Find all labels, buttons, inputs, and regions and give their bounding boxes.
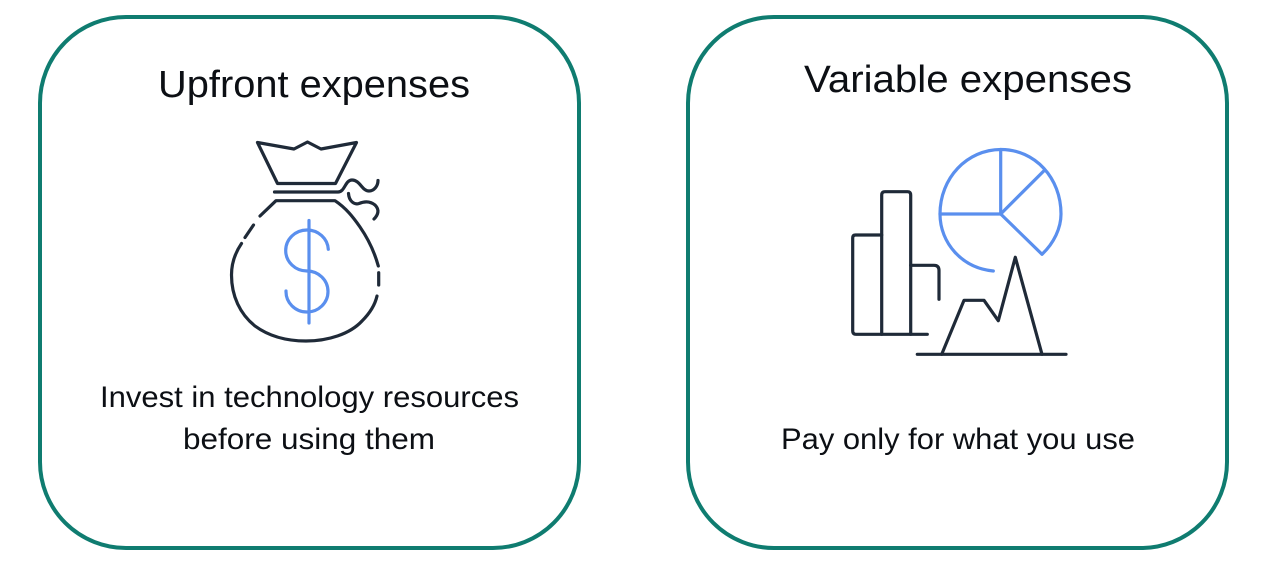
body text: upfront expenses: before using them xyxy=(183,423,435,456)
icon: area chart xyxy=(917,257,1066,354)
heading: variable expenses: Variable expenses xyxy=(804,59,1132,101)
panel: upfront expenses xyxy=(40,17,579,548)
icon: charts xyxy=(853,150,1066,354)
icon: money bag xyxy=(232,142,379,341)
body text: upfront expenses: Invest in technology resources xyxy=(100,381,519,414)
heading: upfront expenses: Upfront expenses xyxy=(158,64,470,106)
body text: upfront expenses xyxy=(100,381,519,456)
icon: dollar sign xyxy=(286,220,328,323)
body text: variable expenses: Pay only for what you use xyxy=(781,423,1135,456)
panel: variable expenses xyxy=(688,17,1227,548)
icon: bar chart xyxy=(853,192,939,334)
icon: pie chart xyxy=(940,150,1061,271)
